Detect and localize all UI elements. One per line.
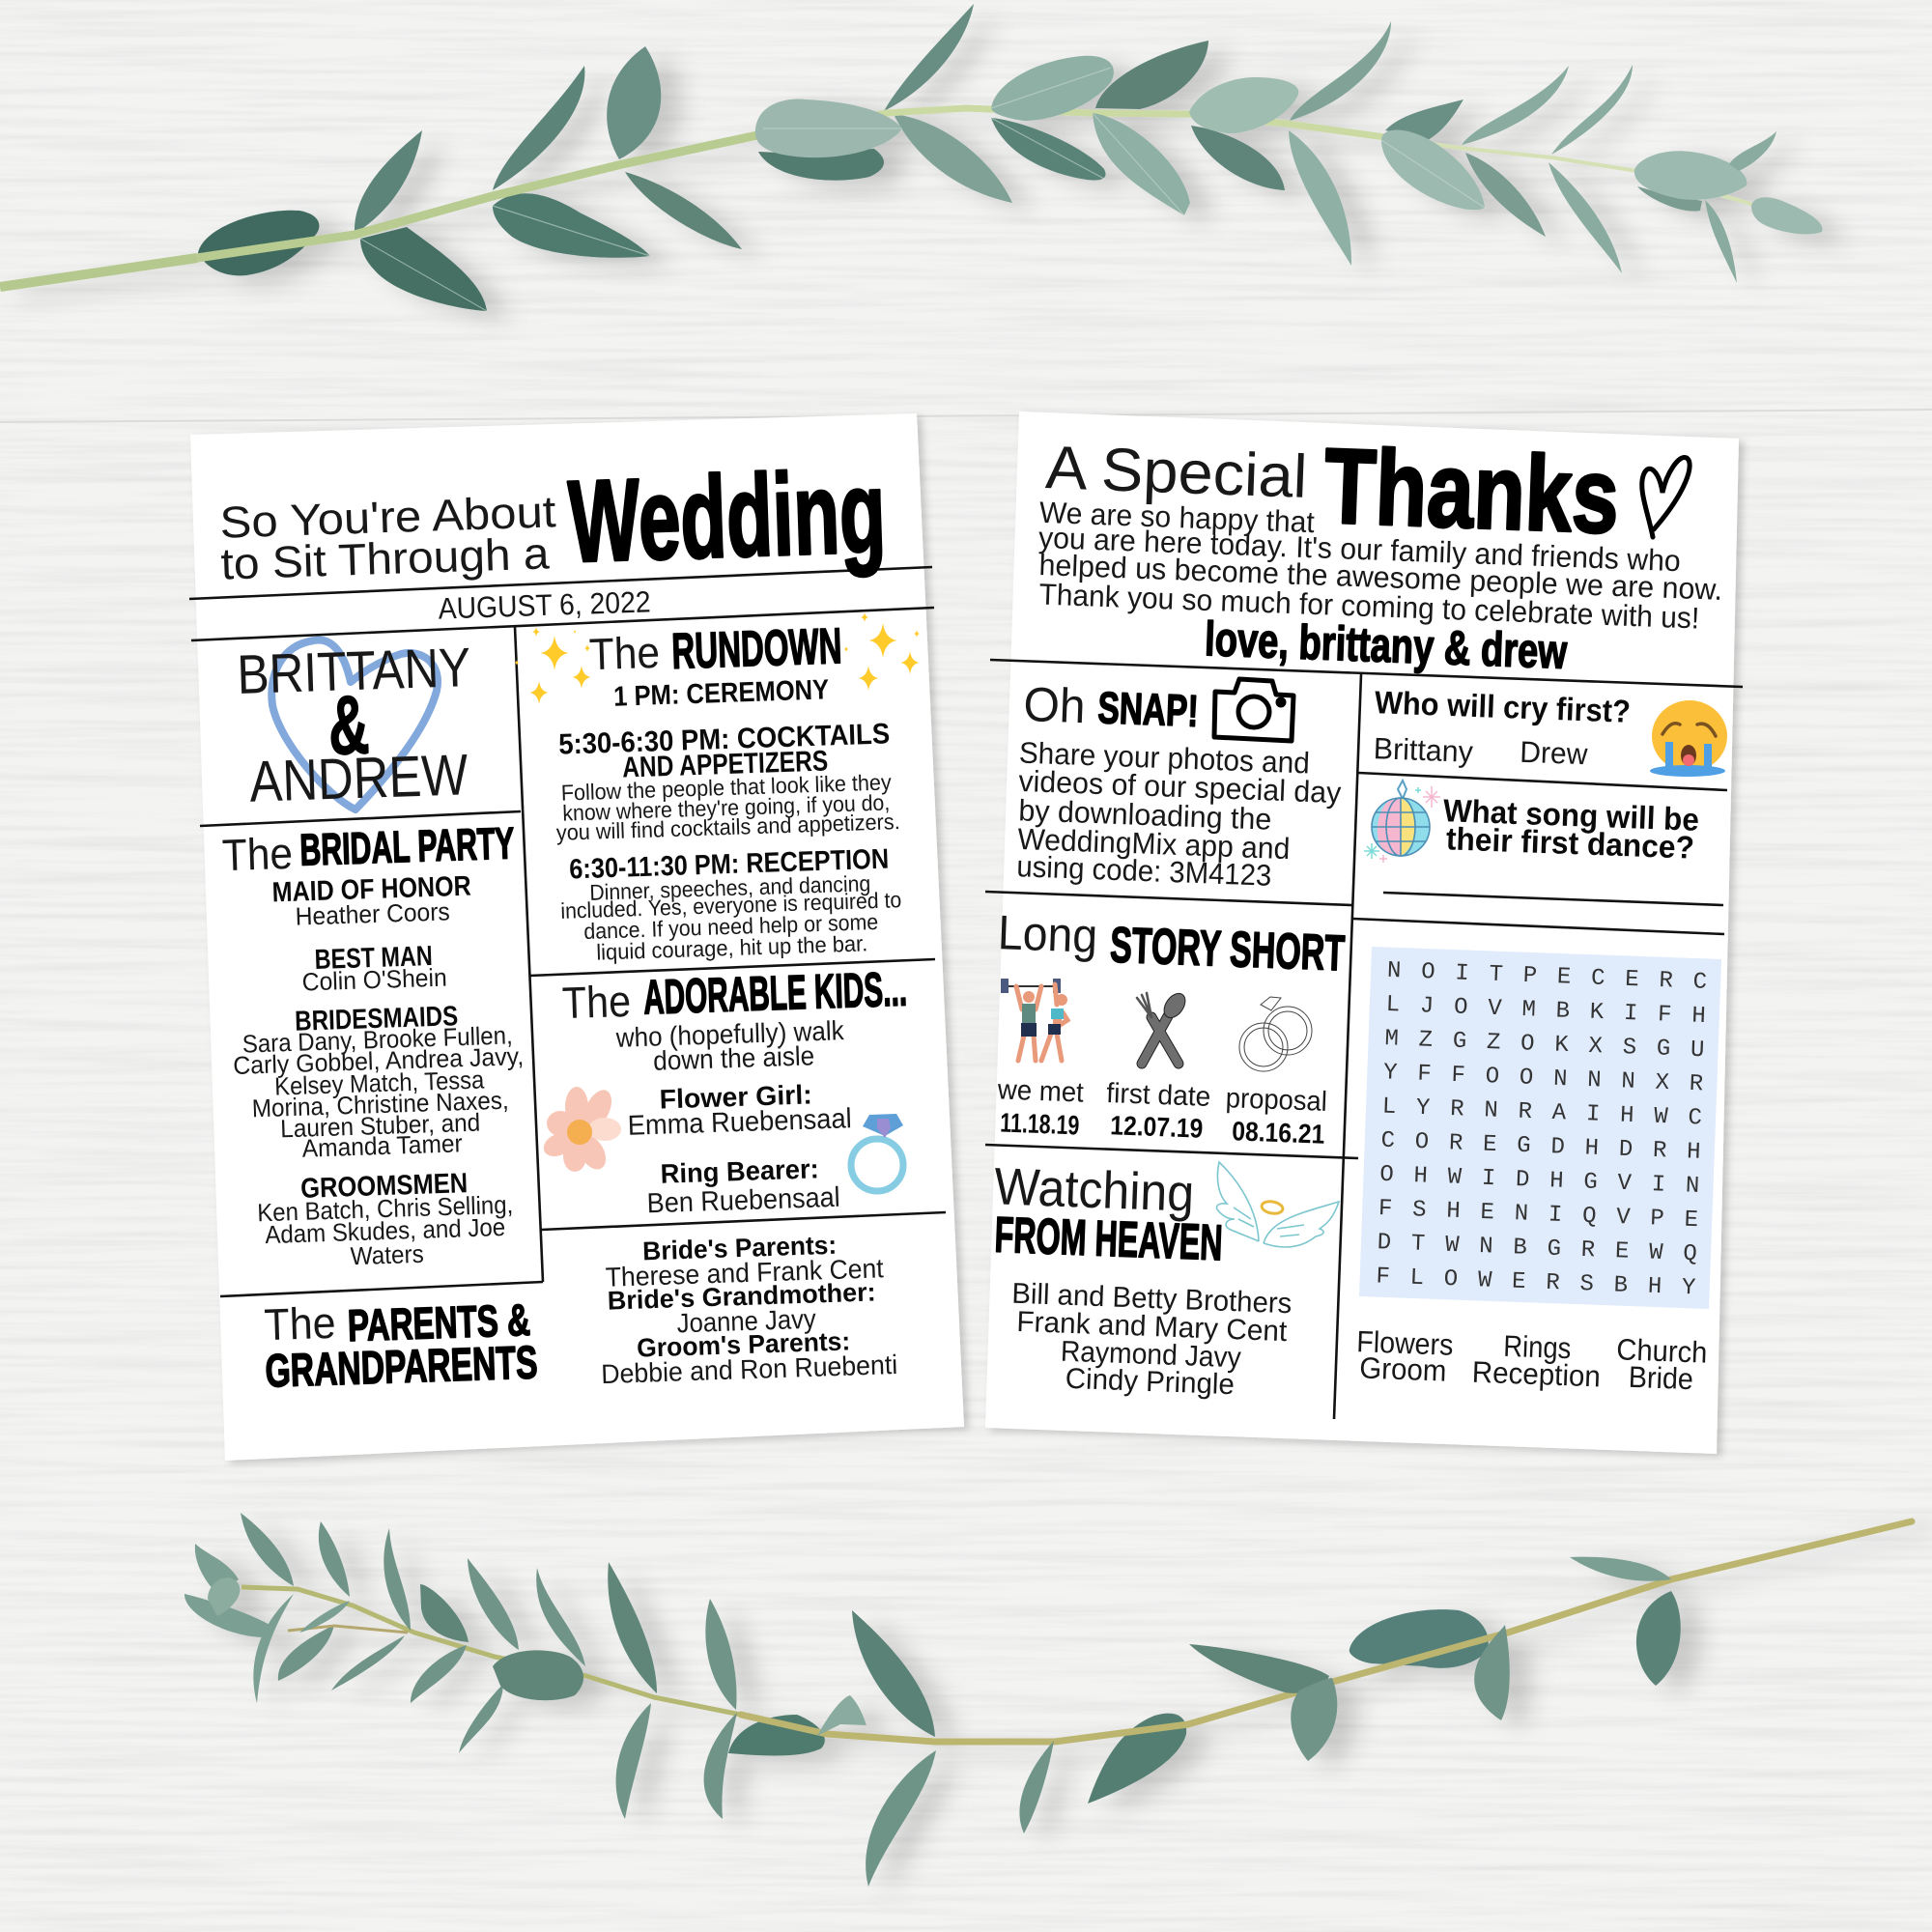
icon: blue heart [271, 639, 438, 810]
kids text: Emma Ruebensaal [627, 1103, 852, 1142]
heading: watching from heaven [993, 1157, 1224, 1271]
schedule: liquid courage, hit up the bar. [596, 930, 868, 965]
heading: long story short: Long [997, 905, 1098, 963]
oh snap text: Share your photos and [1018, 736, 1310, 781]
heading: parents and grandparents: The [264, 1297, 336, 1350]
heading: a special thanks [1044, 426, 1621, 556]
bridal party list: MAID OF HONOR [271, 871, 471, 908]
icon: yellow sparkles [515, 612, 920, 704]
heading: the rundown: RUNDOWN [671, 618, 842, 680]
heading: oh snap: SNAP! [1097, 682, 1200, 736]
right card paper [985, 412, 1739, 1454]
heading: oh snap [1023, 677, 1200, 736]
title: So You're About [219, 486, 556, 548]
heading: watching from heaven: Watching [993, 1157, 1195, 1223]
schedule: 6:30-11:30 PM: RECEPTION [569, 844, 890, 885]
top eucalyptus branch [0, 4, 1823, 311]
word search background [1359, 947, 1721, 1309]
panel: long story short [996, 905, 1346, 1150]
panel: parents list: Bride's Parents: [642, 1231, 838, 1265]
kids text [614, 1015, 852, 1219]
couple names: & [327, 678, 371, 773]
schedule: AND APPETIZERS [622, 745, 829, 784]
word list [1356, 1324, 1708, 1396]
thank you message: you are here today. It's our family and friends who [1037, 521, 1681, 578]
schedule: Follow the people that look like they [560, 769, 893, 806]
timeline labels: we met [996, 1074, 1084, 1109]
schedule: 5:30-6:30 PM: COCKTAILS [558, 718, 891, 761]
thank you message [1037, 496, 1723, 636]
panel: parents list: Joanne Javy [676, 1304, 816, 1338]
schedule: you will find cocktails and appetizers. [555, 809, 900, 845]
bridal party list: BEST MAN [314, 941, 433, 976]
couple names [236, 637, 471, 814]
names in memory: Cindy Pringle [1065, 1363, 1235, 1401]
heading: long story short: STORY SHORT [1109, 918, 1346, 981]
schedule: 1 PM: CEREMONY [613, 674, 830, 713]
word search letters: FSHENIQVPE [1378, 1196, 1698, 1234]
heading: parents and grandparents [264, 1294, 538, 1398]
word list: Rings [1503, 1329, 1572, 1365]
panel: parents list: Debbie and Ron Ruebenti [601, 1350, 898, 1389]
timeline labels: 11.18.19 [1000, 1108, 1080, 1140]
thank you message: Thank you so much for coming to celebrate with us! [1038, 577, 1700, 636]
icon: disco ball [1364, 781, 1440, 863]
panel: who will cry first: Drew [1520, 735, 1589, 771]
title: Wedding [567, 447, 888, 586]
bridal party list: Morina, Christine Naxes, [251, 1086, 509, 1122]
icon: couple lifting weights [1001, 979, 1067, 1061]
timeline labels: 08.16.21 [1232, 1116, 1325, 1150]
icon: diamond ring [851, 1114, 903, 1191]
bridal party list: BRIDESMAIDS [295, 1001, 459, 1037]
icon: wedding rings [1239, 997, 1312, 1071]
bridal party list: GROOMSMEN [300, 1168, 469, 1205]
names in memory: Frank and Mary Cent [1016, 1306, 1289, 1348]
word list: Bride [1628, 1360, 1694, 1396]
icon: watercolor flower [540, 1086, 621, 1174]
word search letters: DTWNBGREWQ [1377, 1230, 1697, 1267]
bridal party list: Sara Dany, Brooke Fullen, [242, 1020, 513, 1059]
word list: Flowers [1356, 1324, 1454, 1362]
oh snap text: WeddingMix app and [1017, 822, 1291, 866]
panel: oh snap [1016, 677, 1342, 893]
right card dividers [985, 660, 1743, 1419]
bridal party list [233, 871, 525, 1270]
panel: left program card [189, 413, 964, 1461]
bottom eucalyptus branch [185, 1513, 1912, 1887]
panel: right program card [985, 412, 1743, 1454]
heading: the rundown: The [588, 627, 661, 679]
word search letters [1376, 958, 1707, 1301]
bridal party list: Ken Batch, Chris Selling, [257, 1190, 514, 1227]
timeline labels: proposal [1225, 1083, 1327, 1118]
kids text: down the aisle [653, 1040, 815, 1076]
thank you message: helped us become the awesome people we are now. [1038, 548, 1723, 607]
date: AUGUST 6, 2022 [438, 584, 651, 626]
bridal party list: Adam Skudes, and Joe [265, 1212, 506, 1249]
schedule: dance. If you need help or some [583, 909, 879, 944]
bridal party list: Waters [350, 1239, 424, 1270]
names in memory: Bill and Betty Brothers [1011, 1278, 1293, 1320]
timeline labels [996, 1074, 1327, 1150]
title: to Sit Through a [220, 527, 551, 589]
heading: long story short [997, 905, 1346, 981]
schedule: know where they're going, if you do, [562, 789, 891, 826]
kids text: Ben Ruebensaal [646, 1182, 840, 1219]
panel: parents list [601, 1231, 898, 1389]
title [219, 447, 888, 589]
schedule: Dinner, speeches, and dancing [589, 870, 871, 905]
names in memory [1011, 1278, 1293, 1401]
icon: crying emoji [1650, 700, 1727, 777]
icon: fork and spoon [1137, 989, 1189, 1064]
icon: hand drawn heart [1642, 457, 1690, 537]
heading: watching from heaven: FROM HEAVEN [994, 1208, 1224, 1271]
bridal party list: Heather Coors [295, 896, 450, 931]
heading: the rundown [588, 618, 842, 680]
bridal party list: Amanda Tamer [301, 1128, 463, 1163]
oh snap text: videos of our special day [1018, 764, 1342, 810]
panel: who will cry first [1373, 684, 1727, 777]
timeline labels: 12.07.19 [1110, 1110, 1204, 1144]
heading: adorable kids: ADORABLE KIDS... [642, 961, 908, 1025]
panel: the adorable kids [540, 961, 908, 1219]
names in memory: Raymond Javy [1060, 1336, 1241, 1374]
icon: camera [1214, 679, 1293, 741]
word list: Groom [1359, 1350, 1447, 1388]
panel: first dance song: What song will be [1442, 792, 1700, 838]
panel: parents list: Therese and Frank Cent [605, 1253, 884, 1293]
word search letters: LJOVMBKIFH [1385, 992, 1706, 1030]
word search letters: NOITPECERC [1387, 958, 1707, 996]
bridal party list: Lauren Stuber, and [280, 1108, 481, 1143]
oh snap text [1016, 736, 1342, 893]
panel: parents list: Groom's Parents: [637, 1326, 851, 1363]
timeline labels: first date [1106, 1078, 1211, 1113]
signature: love, brittany & drew [1204, 611, 1568, 679]
couple names: ANDREW [248, 742, 469, 814]
bridal party list: Kelsey Match, Tessa [274, 1065, 485, 1101]
heading: bridal party: The [221, 828, 294, 880]
word search letters: YFFOONNNXR [1383, 1060, 1704, 1097]
heading: bridal party [221, 817, 515, 880]
kids text: Ring Bearer: [660, 1153, 819, 1189]
word search letters: FLOWERSBHY [1376, 1264, 1696, 1301]
left card dividers [189, 567, 946, 1296]
panel: who will cry first: Brittany [1373, 731, 1474, 769]
word search letters: MZGZOKXSGU [1384, 1026, 1705, 1064]
heading: parents and grandparents: PARENTS & [347, 1294, 531, 1350]
word list: Church [1616, 1332, 1708, 1370]
couple names: BRITTANY [236, 637, 471, 706]
thank you message: We are so happy that [1038, 496, 1316, 539]
schedule [555, 674, 902, 965]
heading: oh snap: Oh [1023, 677, 1087, 733]
panel: the rundown [555, 618, 902, 965]
panel: bridal party [221, 817, 525, 1270]
kids text: who (hopefully) walk [614, 1015, 845, 1053]
heading: a special thanks: Thanks [1322, 426, 1621, 556]
heading: adorable kids [561, 961, 908, 1028]
heading: bridal party: BRIDAL PARTY [299, 817, 515, 875]
panel: first dance song: their first dance? [1445, 820, 1695, 866]
word search letters: OHWIDHGVIN [1379, 1162, 1700, 1200]
panel: watching from heaven [993, 1157, 1339, 1401]
heading: parents and grandparents: GRANDPARENTS [265, 1337, 538, 1398]
schedule: included. Yes, everyone is required to [560, 887, 902, 923]
kids text: Flower Girl: [659, 1079, 812, 1115]
heading: a special thanks: A Special [1044, 434, 1308, 511]
icon: angel wings and halo [1216, 1162, 1339, 1247]
heading: adorable kids: The [561, 976, 632, 1028]
bridal party list: Colin O'Shein [301, 963, 447, 996]
word search letters: LYRNRAIHWC [1381, 1094, 1702, 1132]
oh snap text: using code: 3M4123 [1016, 849, 1272, 893]
left card paper [190, 413, 964, 1461]
panel: first dance song [1364, 781, 1700, 866]
oh snap text: by downloading the [1018, 793, 1272, 837]
word list: Reception [1471, 1355, 1601, 1393]
panel: who will cry first: Who will cry first? [1374, 684, 1632, 729]
panel: word search [1356, 947, 1721, 1396]
word search letters: COREGDHDRH [1380, 1128, 1701, 1166]
bridal party list: Carly Gobbel, Andrea Javy, [233, 1041, 525, 1080]
panel: parents list: Bride's Grandmother: [607, 1277, 876, 1316]
